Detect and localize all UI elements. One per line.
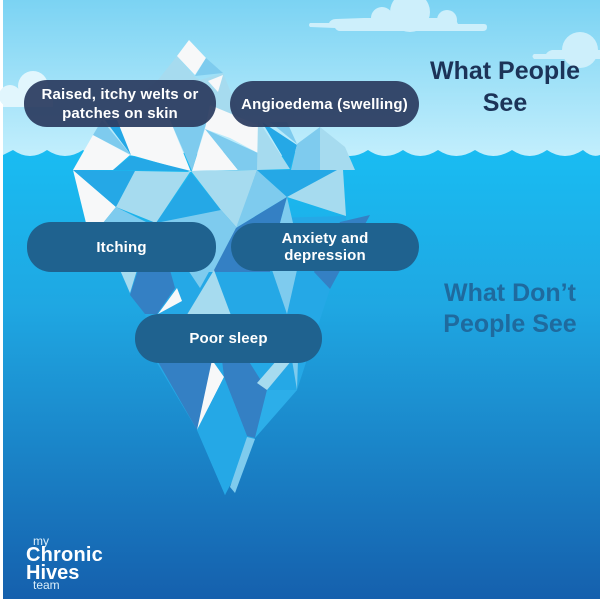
label: anxiety and depression: depression (284, 247, 366, 264)
label: raised welts: Raised, itchy welts or (42, 86, 198, 102)
label: poor sleep: Poor sleep (189, 330, 268, 347)
clouds (0, 0, 600, 107)
logo: my (33, 534, 49, 548)
sea with waves (3, 150, 600, 599)
label: itching: Itching (96, 238, 147, 256)
label: raised welts: patches on skin (62, 104, 178, 122)
heading: what people see: What People (430, 57, 580, 85)
logo (26, 534, 103, 592)
heading: what people see: See (483, 89, 527, 117)
label: raised welts (24, 80, 216, 127)
label: itching (27, 222, 216, 272)
iceberg (73, 40, 370, 495)
label: anxiety and depression (231, 223, 419, 271)
logo: team (33, 578, 60, 592)
label: anxiety and depression: Anxiety and (282, 230, 368, 247)
label: angioedema: Angioedema (swelling) (241, 96, 408, 112)
logo: Chronic (26, 544, 103, 566)
heading: what don't people see: People See (443, 310, 577, 338)
sky (3, 0, 600, 165)
label: poor sleep (135, 314, 322, 363)
heading: what people see (430, 57, 580, 117)
heading: what don't people see (443, 279, 577, 338)
logo: Hives (26, 562, 79, 584)
label: angioedema (230, 81, 419, 127)
heading: what don't people see: What Don’t (444, 279, 576, 307)
